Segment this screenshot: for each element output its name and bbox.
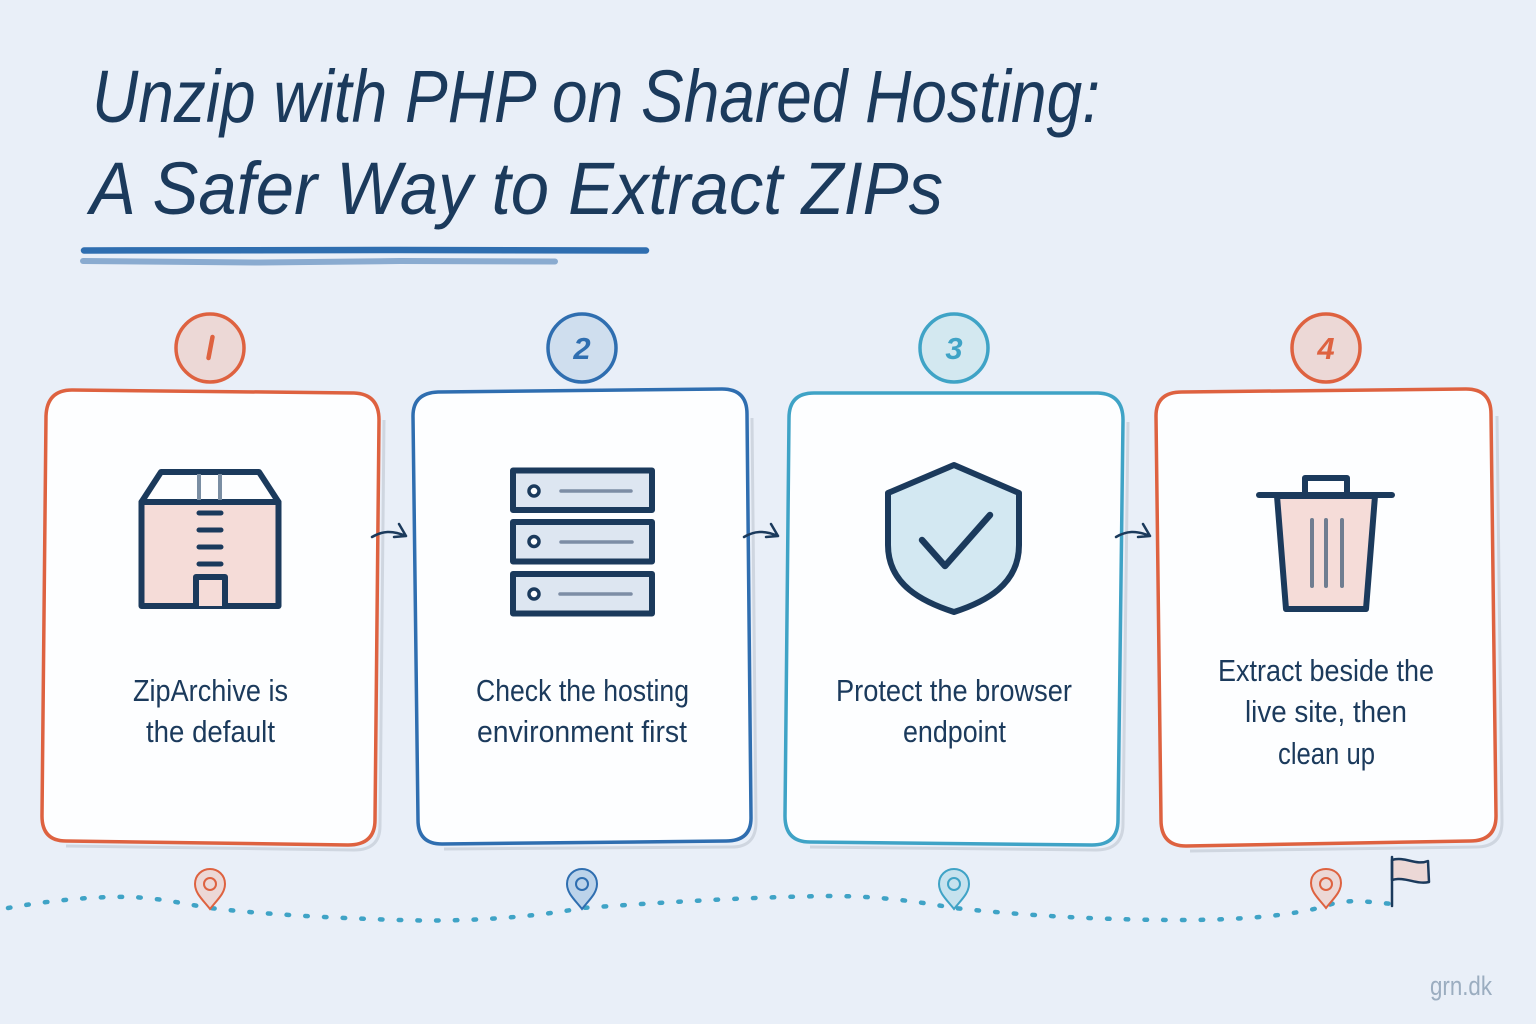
title: Unzip with PHP on Shared Hosting: [92,55,1100,138]
icon: shield with check [888,465,1019,612]
step 3 text [836,673,1072,749]
title underline [83,250,646,262]
card outline 3 [785,393,1123,845]
step badge 3: 3 [945,331,963,366]
watermark: grn.dk [1430,971,1492,1001]
step 2 text: Check the hosting [476,673,689,708]
step 3 text: endpoint [903,714,1006,749]
step 4 text [1218,653,1434,771]
step badge 4: 4 [1316,331,1335,366]
step badge 4 [1292,314,1360,382]
pin 3 [939,869,969,909]
card outline 4 [1156,389,1496,846]
pin 4 [1311,869,1341,908]
icon: finish flag [1392,857,1429,906]
step 2 text [476,673,689,749]
dotted route line [8,896,1392,920]
step badge 2 [548,314,616,382]
panel: step 4 [1156,314,1502,851]
panel: step 2 [413,314,756,849]
icon: server stack [513,470,652,614]
panel: step 3 [785,314,1128,850]
step 4 text: live site, then [1245,694,1407,729]
step 1 text [133,673,288,749]
pin 1 [195,869,225,909]
step 4 text: clean up [1278,736,1375,771]
icon: trash can [1259,478,1392,609]
step 4 text: Extract beside the [1218,653,1434,688]
panel: step 1 [42,314,384,850]
step 2 text: environment first [477,714,687,749]
pin 2 [567,869,597,909]
step 1 text: ZipArchive is [133,673,288,708]
step badge 3 [920,314,988,382]
icon: box [142,472,278,606]
step badge 2: 2 [572,331,591,366]
card outline 2 [413,389,751,844]
title [86,55,1100,230]
step 1 text: the default [146,714,275,749]
arrow 3 to 4 [1116,524,1150,537]
title: A Safer Way to Extract ZIPs [86,147,943,230]
card outline 1 [42,390,379,845]
arrow 2 to 3 [744,524,778,537]
arrow 1 to 2 [372,524,406,537]
step badge 1 [176,314,244,382]
step 3 text: Protect the browser [836,673,1072,708]
